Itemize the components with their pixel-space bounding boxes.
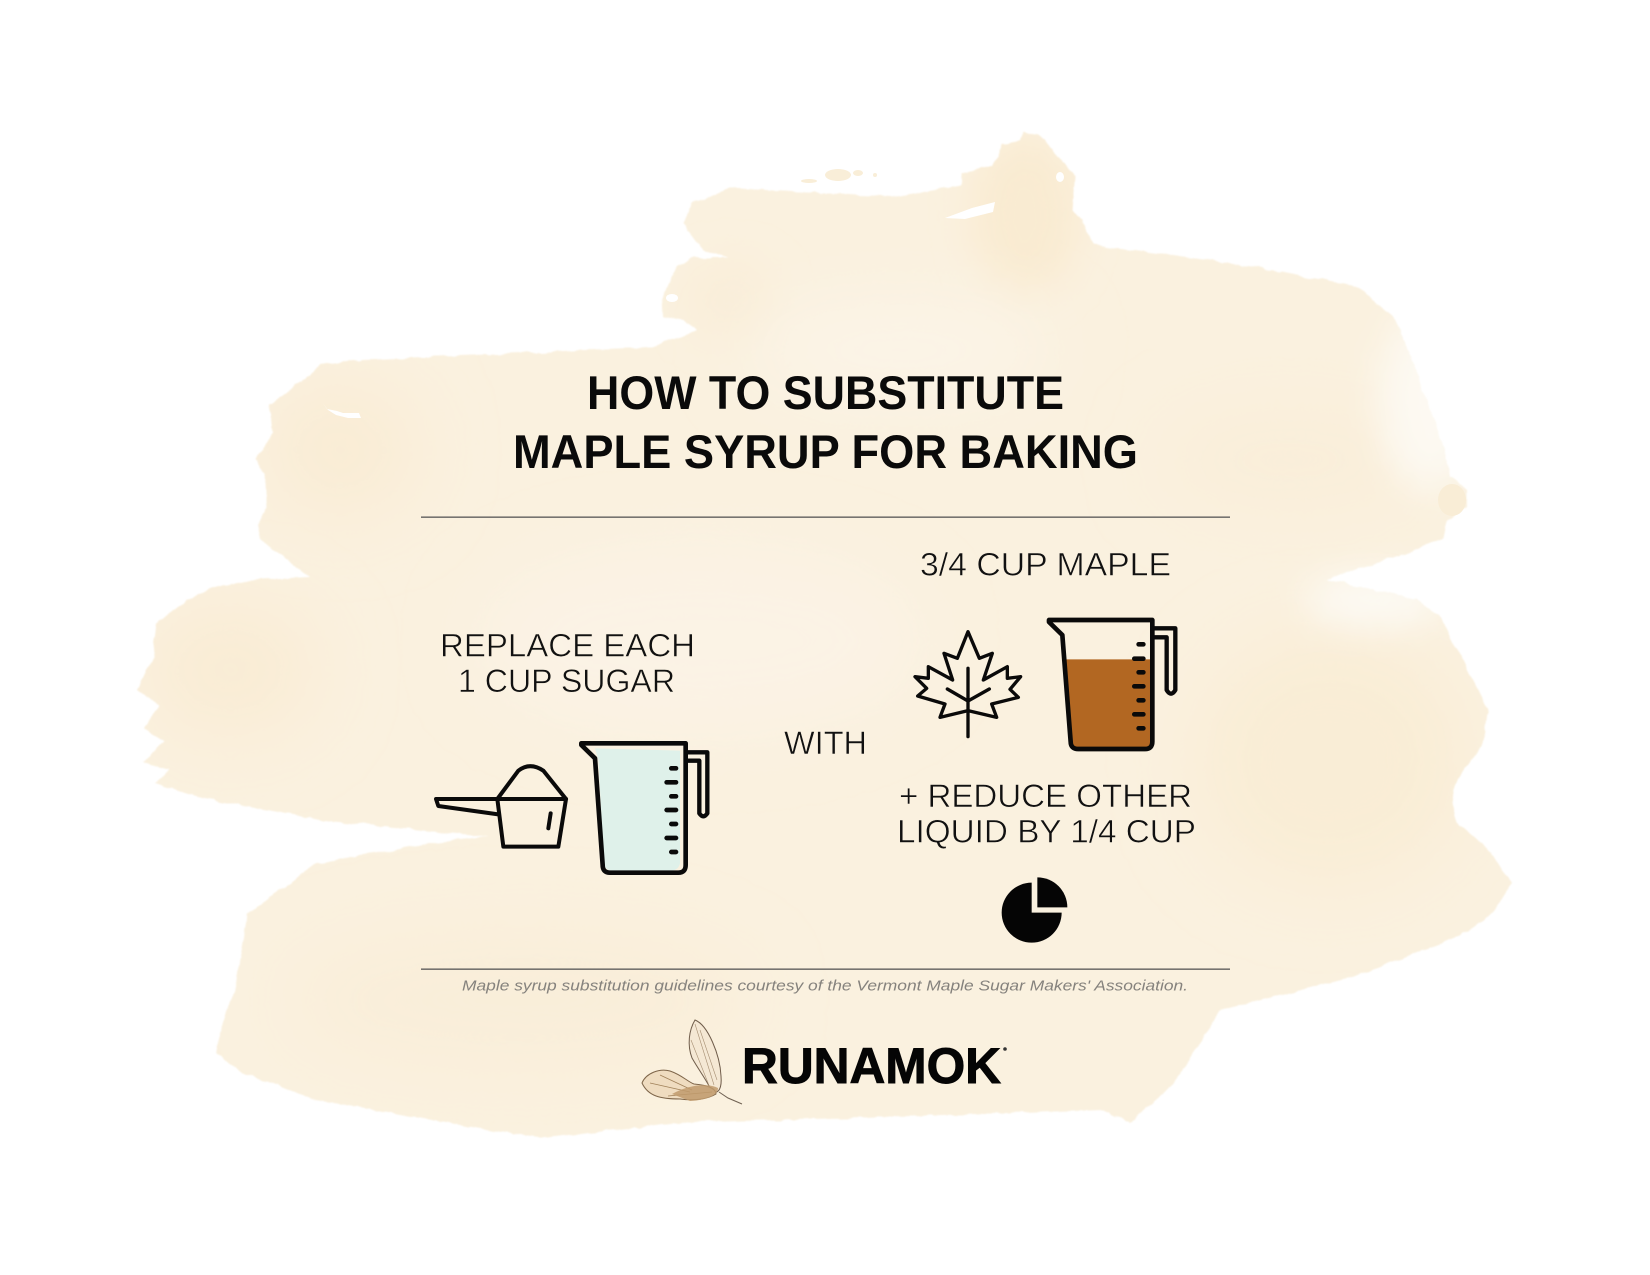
text: reduce other liquid: LIQUID BY 1/4 CUP	[897, 814, 1196, 850]
text: replace each 1 cup sugar: 1 CUP SUGAR	[458, 663, 675, 699]
text: replace each 1 cup sugar	[440, 628, 695, 699]
bottom divider	[421, 968, 1230, 970]
icon: maple seed	[642, 1020, 742, 1104]
top divider	[421, 516, 1230, 518]
text: with: WITH	[784, 725, 867, 761]
icon: sugar scoop	[436, 766, 566, 847]
icon: measuring jug with maple syrup	[1049, 620, 1175, 749]
icon: measuring jug with sugar	[581, 743, 707, 873]
text: reduce other liquid	[897, 778, 1196, 850]
title: HOW TO SUBSTITUTE	[587, 366, 1064, 419]
icon: quarter pie	[1002, 877, 1067, 943]
title: MAPLE SYRUP FOR BAKING	[513, 425, 1138, 478]
panel: watercolor brush background	[138, 133, 1512, 1138]
text: replace each 1 cup sugar: REPLACE EACH	[440, 628, 695, 664]
footnote: Maple syrup substitution guidelines courtesy of the Vermont Maple Sugar Makers' Association.	[462, 978, 1188, 994]
title	[513, 366, 1138, 478]
logo: RUNAMOK wordmark: RUNAMOK	[742, 1038, 1001, 1094]
text: reduce other liquid: + REDUCE OTHER	[899, 778, 1192, 814]
icon: maple leaf	[915, 632, 1021, 737]
text: 3/4 cup maple: 3/4 CUP MAPLE	[920, 546, 1171, 582]
